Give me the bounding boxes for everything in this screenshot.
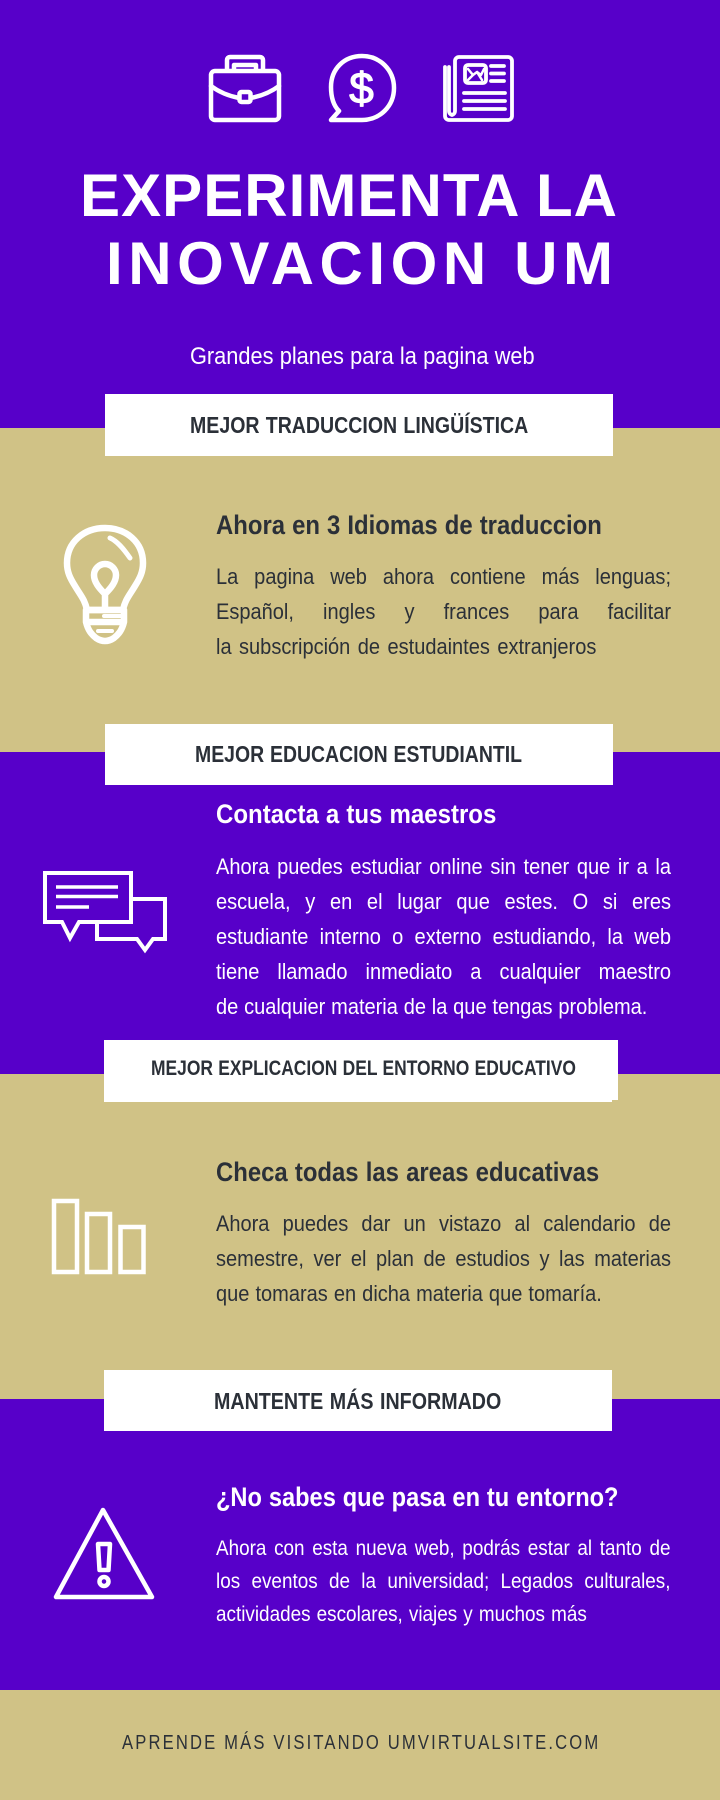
section 4 title: ¿No sabes que pasa en tu entorno?: [216, 1482, 618, 1512]
section 2 body text: [216, 854, 672, 1019]
icon: bar chart: [52, 1198, 146, 1274]
heading text: MEJOR TRADUCCION LINGÜÍSTICA: [190, 412, 528, 438]
section 2 body text: Ahora puedes estudiar online sin tener que ir a la: [216, 854, 671, 879]
icon: newspaper: [443, 55, 514, 122]
heading bar: section 1: [105, 394, 613, 456]
section 2 body text: estudiante interno o externo estudiando, la web: [216, 924, 671, 949]
section 3 title: Checa todas las areas educativas: [216, 1157, 599, 1187]
section 3 body text: semestre, ver el plan de estudios y las materias: [216, 1246, 671, 1271]
icon: dollar speech bubble: $: [349, 64, 374, 113]
section 3 body text: [216, 1211, 671, 1306]
section 4 body text: actividades escolares, viajes y muchos más: [216, 1603, 587, 1626]
heading text: MANTENTE MÁS INFORMADO: [214, 1388, 501, 1414]
title: EXPERIMENTA LA: [80, 162, 617, 229]
section 1 body text: [216, 564, 671, 659]
section 2 title: Contacta a tus maestros: [216, 799, 496, 829]
section 2 body text: escuela, y en el lugar que estes. O si eres: [216, 889, 671, 914]
panel: section 4: [0, 1399, 720, 1690]
icon: light bulb: [64, 524, 146, 644]
heading bar: section 2: [105, 724, 613, 785]
panel: header: [0, 0, 720, 428]
panel: section 1: [0, 428, 720, 752]
footer text: APRENDE MÁS VISITANDO UMVIRTUALSITE.COM: [122, 1732, 600, 1754]
icon: warning triangle: [54, 1508, 154, 1600]
heading bar: section 3: [104, 1040, 618, 1102]
section 2 body text: de cualquier materia de la que tengas problema.: [216, 994, 647, 1019]
section 2 body text: tiene llamado inmediato a cualquier maestro: [216, 959, 671, 984]
title: [80, 162, 617, 297]
section 4 body text: Ahora con esta nueva web, podrás estar al tanto de: [216, 1537, 670, 1560]
section 3 body text: Ahora puedes dar un vistazo al calendario de: [216, 1211, 671, 1236]
subtitle: Grandes planes para la pagina web: [190, 343, 535, 370]
title: INOVACION UM: [106, 230, 613, 297]
panel: footer: [0, 1690, 720, 1800]
heading text: MEJOR EDUCACION ESTUDIANTIL: [195, 741, 522, 767]
icon: briefcase: [208, 54, 282, 122]
section 1 body text: La pagina web ahora contiene más lenguas;: [216, 564, 671, 589]
section 1 body text: Español, ingles y frances para facilitar: [216, 599, 671, 624]
icon: chat bubbles: [43, 871, 167, 954]
section 1 body text: la subscripción de estudaintes extranjeros: [216, 634, 596, 659]
icon: dollar speech bubble: [328, 54, 396, 122]
panel: section 2: [0, 752, 720, 1074]
section 1 title: Ahora en 3 Idiomas de traduccion: [216, 510, 602, 540]
heading bar: section 4: [104, 1370, 612, 1431]
section 4 body text: los eventos de la universidad; Legados culturales,: [216, 1570, 670, 1593]
panel: section 3: [0, 1074, 720, 1399]
section 3 body text: que tomaras en dicha materia que tomaría.: [216, 1281, 602, 1306]
section 4 body text: [216, 1537, 670, 1626]
heading text: MEJOR EXPLICACION DEL ENTORNO EDUCATIVO: [151, 1057, 576, 1080]
